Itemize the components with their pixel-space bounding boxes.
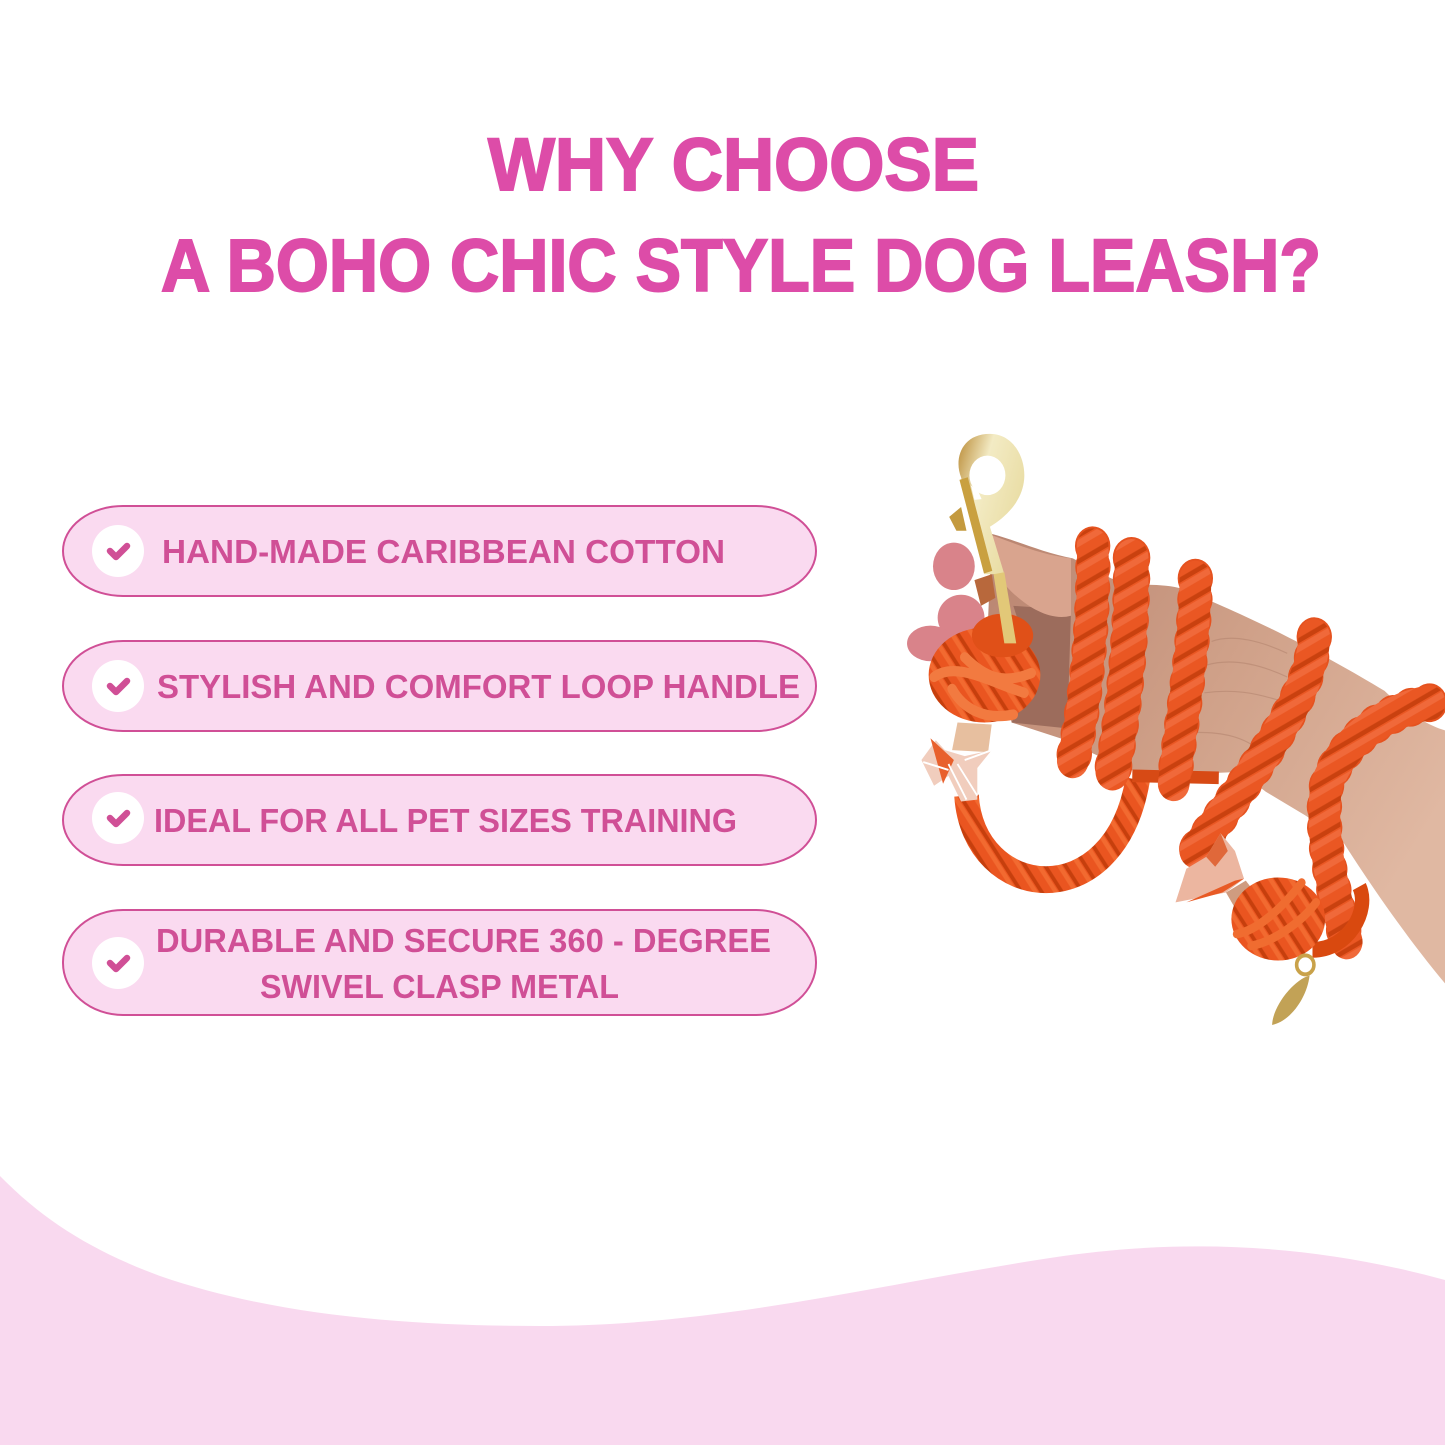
rope behind hand (1132, 776, 1219, 778)
knot 2 (1231, 877, 1325, 961)
thumb (990, 535, 1071, 617)
feature pill: hand-made cotton: HAND-MADE CARIBBEAN COTTON (162, 533, 725, 570)
rope coil 3 (1174, 578, 1195, 784)
rope coil 5 (1324, 703, 1430, 942)
product illustration: orange rope leash wrapped around a hand (907, 434, 1445, 1025)
tape wrap, lower (1226, 881, 1264, 917)
feature pill: loop handle: STYLISH AND COMFORT LOOP HANDLE (157, 668, 800, 705)
title: WHY CHOOSE (488, 123, 979, 206)
tape wrap, upper (952, 722, 992, 752)
feature list (63, 506, 816, 1015)
shaded palm (1012, 606, 1071, 728)
hand and forearm (988, 534, 1445, 983)
feature pill: swivel clasp: SWIVEL CLASP METAL (260, 968, 619, 1005)
background wave (0, 1176, 1445, 1445)
frayed end, lower (1176, 833, 1244, 902)
feature pill: hand-made cotton (63, 506, 816, 596)
rope loop handle (966, 780, 1138, 880)
feature pill: all pet sizes (63, 775, 816, 865)
rope coil 4 (1195, 637, 1314, 851)
feature pill: all pet sizes: IDEAL FOR ALL PET SIZES TRAINING (154, 802, 737, 839)
rope tail (1312, 887, 1362, 950)
title (161, 123, 1321, 307)
swivel snap clasp (949, 434, 1024, 643)
feature pill: loop handle (63, 641, 816, 731)
feature pill: swivel clasp (63, 910, 816, 1015)
fingers (907, 543, 985, 661)
title: A BOHO CHIC STYLE DOG LEASH? (161, 224, 1321, 307)
wrinkles on the hand (1197, 638, 1287, 752)
knot 1 (929, 614, 1040, 722)
metal tag (1272, 955, 1314, 1025)
feature pill: swivel clasp: DURABLE AND SECURE 360 - DEGREE (156, 922, 771, 959)
rope coil 1 (1073, 546, 1093, 761)
rope coil 2 (1112, 558, 1132, 772)
frayed end, upper (921, 738, 992, 802)
